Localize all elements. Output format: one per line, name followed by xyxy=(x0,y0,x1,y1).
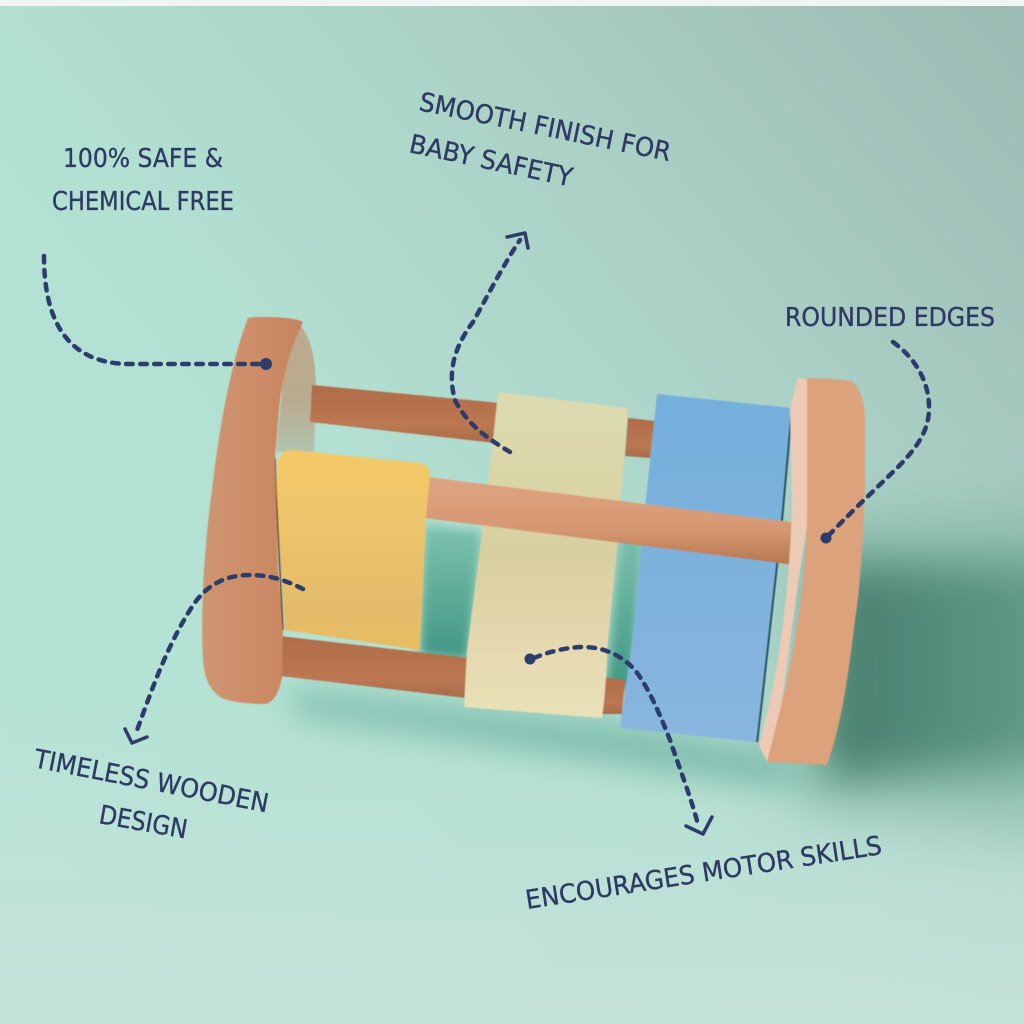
blue block xyxy=(620,394,792,742)
callout: smooth finish: SMOOTH FINISH FOR xyxy=(417,87,673,168)
callout: rounded edges: ROUNDED EDGES xyxy=(785,303,995,333)
callout: timeless wooden design xyxy=(31,575,303,845)
callout: timeless wooden design: TIMELESS WOODEN xyxy=(31,744,271,819)
callout: smooth finish: BABY SAFETY xyxy=(407,130,575,193)
callout: motor skills: ENCOURAGES MOTOR SKILLS xyxy=(523,831,884,916)
back rod xyxy=(310,385,500,443)
wooden rattle toy xyxy=(202,317,865,765)
callout: 100% safe: 100% SAFE & xyxy=(63,144,223,174)
lower rod xyxy=(280,636,470,698)
dark gap beside yellow block xyxy=(275,458,283,630)
shadow of toy xyxy=(285,515,1024,830)
yellow block xyxy=(276,450,430,650)
right disc rim xyxy=(767,378,865,765)
callout: smooth finish xyxy=(407,87,673,452)
back rod right end xyxy=(625,418,655,458)
front rod xyxy=(424,477,798,565)
callout: rounded edges xyxy=(785,303,995,544)
callout: motor skills xyxy=(523,647,884,916)
callout: 100% safe xyxy=(44,144,272,370)
callout: timeless wooden design: DESIGN xyxy=(97,800,190,845)
callout: 100% safe: CHEMICAL FREE xyxy=(52,187,234,217)
lower rod right end xyxy=(600,677,625,714)
dark gap beside blue block xyxy=(757,408,792,742)
left disc back face xyxy=(276,320,316,452)
cream block xyxy=(464,392,628,718)
right disc pale inner face xyxy=(759,378,812,762)
left disc rim xyxy=(202,317,303,704)
